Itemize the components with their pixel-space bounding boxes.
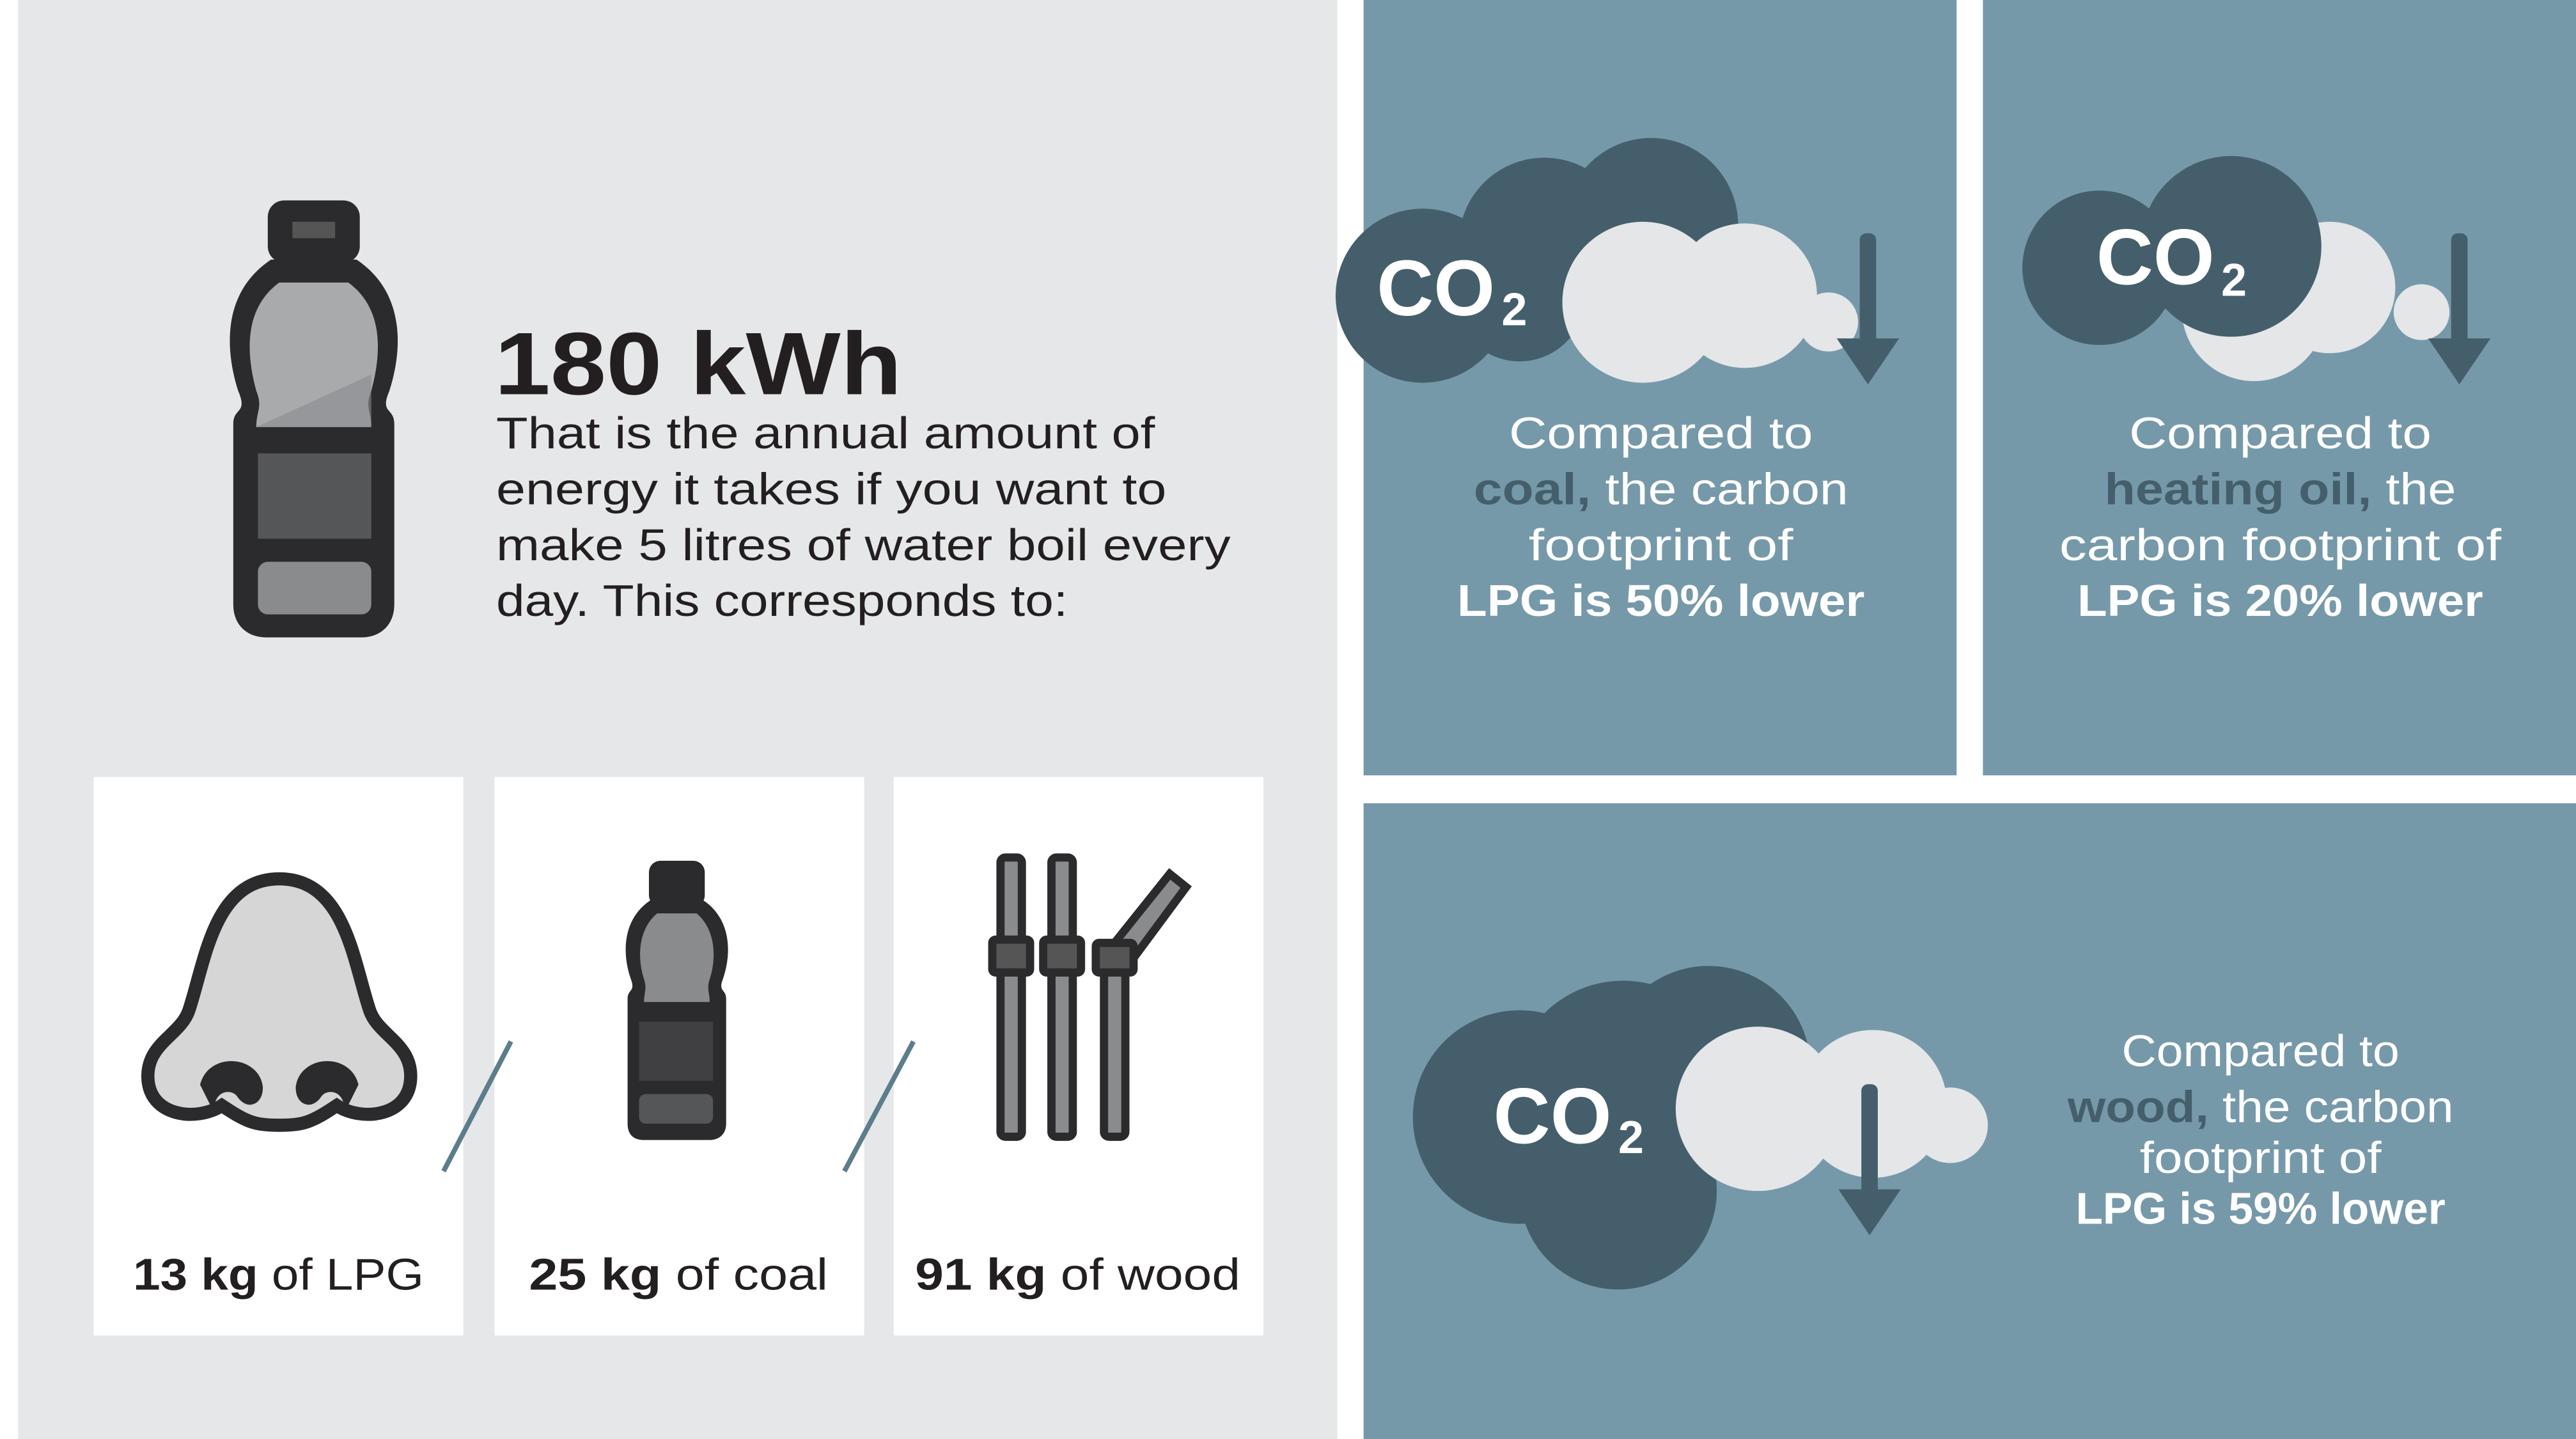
- icon: CO2 cloud wood: [1413, 966, 1988, 1289]
- heading: 180 kWh: 180 kWh: [494, 314, 902, 413]
- icon: large bottle: [230, 200, 398, 638]
- panel: LPG card: [93, 777, 464, 1335]
- panel: coal card: [494, 777, 864, 1335]
- text block: coal comparison: Compared to: [1509, 408, 1813, 458]
- icon: CO2 cloud heating oil: CO: [2096, 213, 2215, 301]
- text block: wood comparison: footprint of: [2140, 1133, 2382, 1183]
- icon: CO2 cloud coal: [1336, 138, 1899, 384]
- text block: heating oil comparison: Compared to: [2129, 408, 2432, 458]
- text block: coal comparison: footprint of: [1529, 520, 1794, 570]
- icon: sticks: [992, 858, 1186, 1136]
- text block: description: make 5 litres of water boil every: [496, 520, 1231, 570]
- text block: heating oil comparison: LPG is 20% lower: [2077, 576, 2483, 625]
- panel: wood card: [894, 777, 1263, 1335]
- panel: coal comparison: [1336, 0, 1956, 775]
- panel: left energy panel: [18, 0, 1338, 1439]
- label: 13 kg of LPG: 13 kg of LPG: [133, 1249, 424, 1299]
- text block: description: day. This corresponds to:: [496, 576, 1068, 625]
- label: 25 kg of coal: 25 kg of coal: [529, 1249, 828, 1299]
- text block: wood comparison: Compared to: [2122, 1026, 2400, 1076]
- icon: CO2 cloud wood: 2: [1618, 1112, 1644, 1163]
- icon: CO2 cloud wood: CO: [1494, 1073, 1612, 1161]
- panel: heating oil comparison: [1983, 0, 2576, 775]
- icon: nose: [148, 879, 410, 1125]
- panel: wood comparison: [1364, 803, 2576, 1439]
- icon: CO2 cloud coal: CO: [1377, 244, 1495, 333]
- text block: heating oil comparison: carbon footprint of: [2059, 520, 2502, 570]
- label: 91 kg of wood: 91 kg of wood: [915, 1249, 1240, 1299]
- icon: small bottle: [626, 861, 728, 1140]
- icon: CO2 cloud heating oil: [2022, 156, 2490, 384]
- text block: wood comparison: wood, the carbon: [2068, 1081, 2431, 1131]
- icon: CO2 cloud coal: 2: [1502, 285, 1527, 336]
- text block: coal comparison: LPG is 50% lower: [1457, 576, 1864, 625]
- text block: coal comparison: coal, the carbon: [1474, 464, 1813, 514]
- text block: description: That is the annual amount of: [496, 408, 1155, 458]
- text block: heating oil comparison: heating oil, the: [2105, 464, 2446, 514]
- text block: description: energy it takes if you want to: [496, 464, 1166, 514]
- icon: CO2 cloud heating oil: 2: [2221, 255, 2247, 306]
- text block: wood comparison: LPG is 59% lower: [2076, 1184, 2446, 1234]
